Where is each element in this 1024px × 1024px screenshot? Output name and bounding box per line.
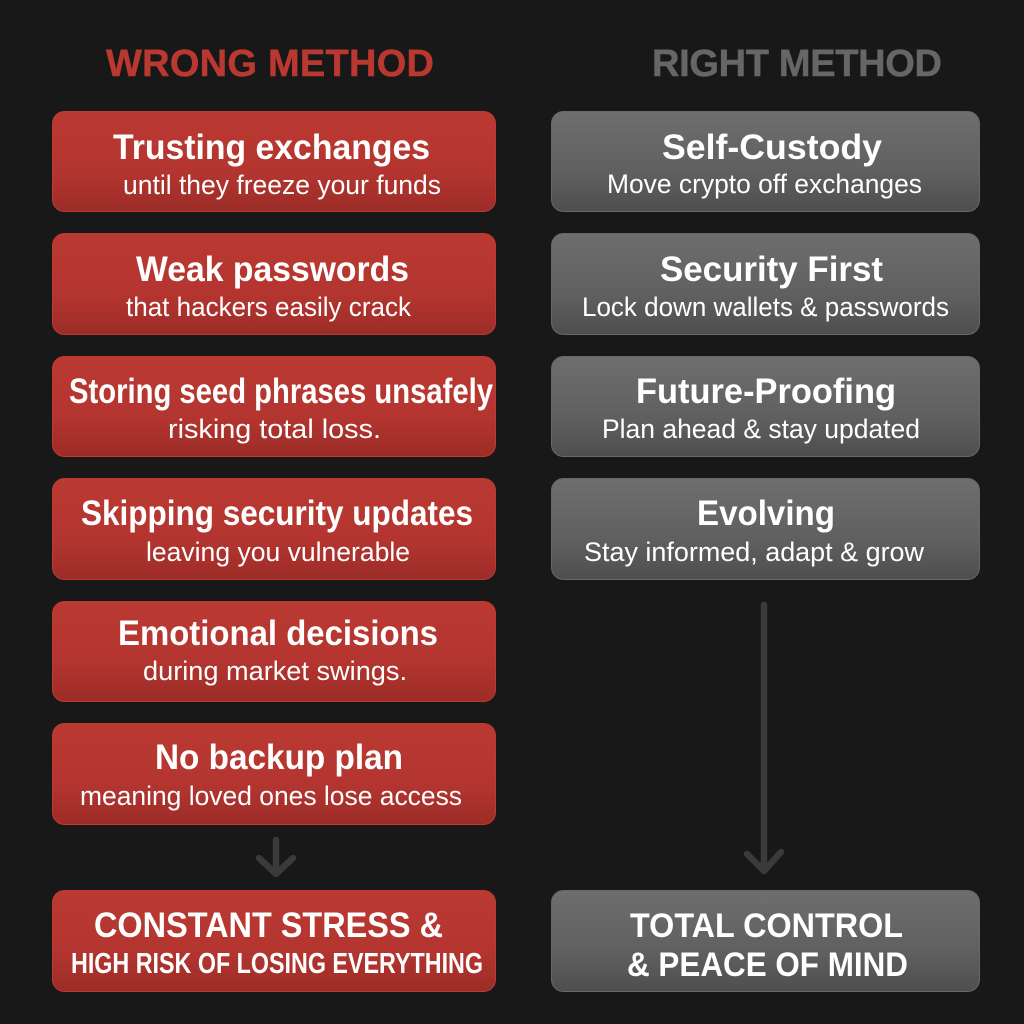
panel: emotional decisions: Emotional decisions: [118, 614, 438, 653]
panel: constant stress outcome: CONSTANT STRESS &: [94, 906, 443, 945]
arrow: right method outcome: [747, 605, 781, 871]
panel: total control outcome: [552, 890, 980, 992]
panel: skipping security updates: leaving you vulnerable: [146, 537, 410, 567]
panel: emotional decisions: during market swings.: [143, 656, 407, 686]
panel: no backup plan: meaning loved ones lose access: [80, 781, 462, 811]
panel: no backup plan: [52, 724, 496, 824]
panel: weak passwords: Weak passwords: [136, 250, 409, 289]
panel: storing seed phrases: [52, 356, 496, 456]
panel: trusting exchanges: [52, 112, 496, 212]
panel: future-proofing: [552, 356, 980, 456]
panel: evolving: Stay informed, adapt & grow: [584, 537, 924, 567]
panel: self-custody: Self-Custody: [662, 128, 883, 167]
panel: evolving: [552, 478, 980, 580]
panel: no backup plan: No backup plan: [155, 738, 403, 777]
panel: future-proofing: Future-Proofing: [636, 372, 896, 411]
panel: security first: Lock down wallets & passwords: [582, 292, 949, 322]
panel: evolving: Evolving: [697, 494, 835, 533]
panel: security first: Security First: [660, 250, 883, 289]
heading: wrong method: WRONG METHOD: [106, 43, 434, 85]
panel: total control outcome: TOTAL CONTROL: [630, 907, 903, 945]
panel: weak passwords: that hackers easily crack: [126, 292, 411, 322]
panel: skipping security updates: Skipping security updates: [81, 494, 473, 533]
panel: trusting exchanges: until they freeze your funds: [123, 170, 441, 200]
arrow: wrong method outcome: [259, 840, 293, 874]
panel: self-custody: Move crypto off exchanges: [607, 169, 922, 199]
heading: right method: RIGHT METHOD: [652, 43, 942, 85]
panel: security first: [552, 234, 980, 334]
panel: storing seed phrases: risking total loss.: [168, 414, 381, 444]
panel: weak passwords: [52, 234, 496, 334]
panel: emotional decisions: [52, 602, 496, 702]
panel: constant stress outcome: HIGH RISK OF LOSING EVERYTHING: [71, 948, 483, 980]
panel: skipping security updates: [52, 478, 496, 580]
panel: total control outcome: & PEACE OF MIND: [627, 946, 908, 984]
panel: future-proofing: Plan ahead & stay updated: [602, 414, 920, 444]
panel: constant stress outcome: [52, 890, 496, 992]
panel: storing seed phrases: Storing seed phrases unsafely: [69, 372, 493, 411]
panel: trusting exchanges: Trusting exchanges: [113, 128, 430, 167]
panel: self-custody: [552, 112, 980, 212]
